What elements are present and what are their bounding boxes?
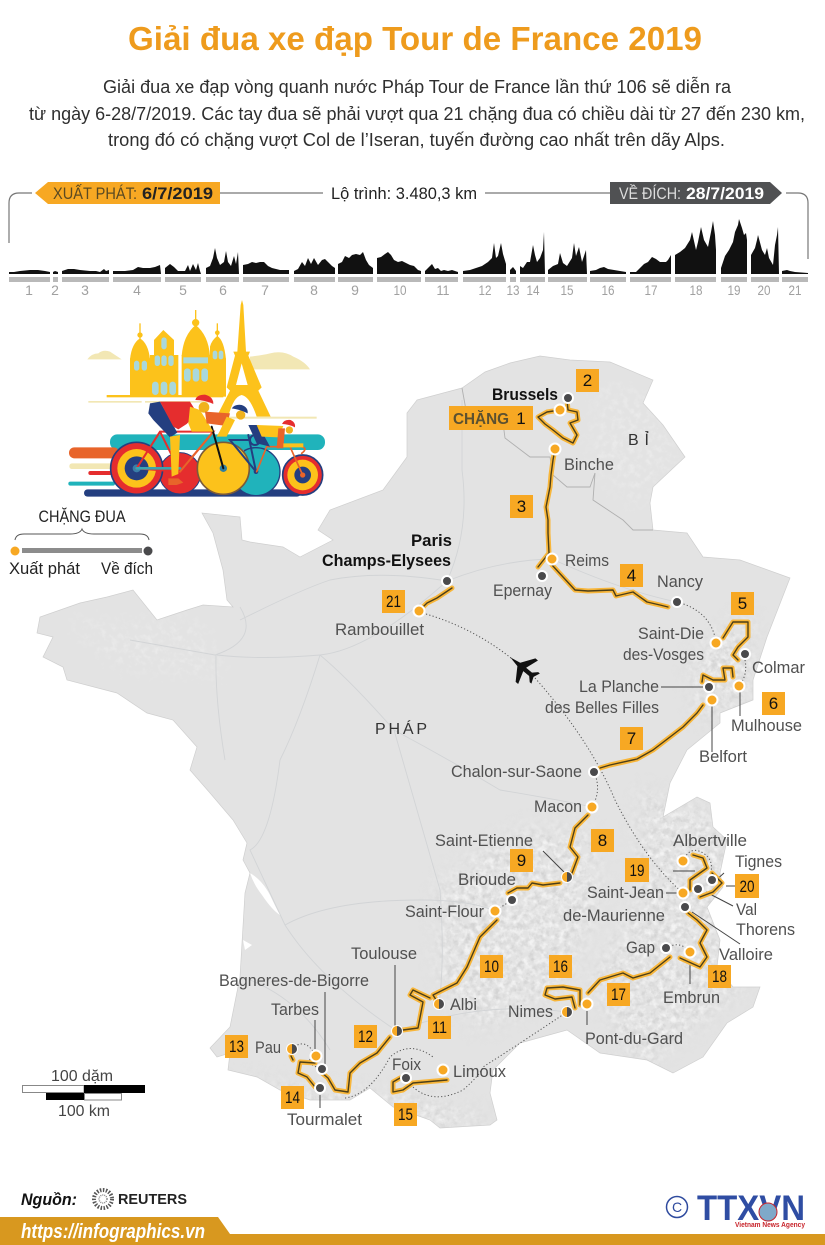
place labels: Albi	[450, 995, 477, 1014]
stage 17 route	[588, 957, 670, 993]
place labels	[219, 385, 805, 1129]
stage number boxes: 17	[611, 985, 626, 1004]
place labels: Albertville	[673, 831, 747, 850]
roads	[130, 400, 677, 1050]
stage 10 route	[433, 920, 497, 1003]
bicycle frames	[137, 427, 305, 475]
stage numbers: 6	[219, 282, 227, 298]
stage numbers: 9	[351, 282, 359, 298]
stage 11 route	[403, 990, 430, 1030]
half markers	[286, 871, 573, 1055]
stage numbers: 18	[690, 282, 703, 298]
stage number boxes: 14	[285, 1088, 300, 1107]
clouds	[87, 351, 310, 369]
legend: stage marker	[9, 507, 153, 578]
place labels: Saint-Etienne	[435, 831, 533, 850]
footer band	[0, 1217, 825, 1245]
scale bar: 100 km	[58, 1103, 110, 1120]
stage 15 route	[393, 1078, 447, 1092]
stage 12 route	[322, 1037, 390, 1092]
stage numbers: 5	[179, 282, 187, 298]
stage number boxes: 13	[229, 1037, 244, 1056]
land base	[38, 356, 790, 1128]
start date tag: 6/7/2019	[142, 185, 213, 203]
finish date tag: 28/7/2019	[686, 185, 764, 203]
stage 9 route	[508, 883, 560, 893]
stage 13 route	[291, 1056, 293, 1060]
stage numbers: 19	[728, 282, 741, 298]
stage number boxes: 15	[398, 1105, 413, 1124]
intro text: trong đó có chặng vượt Col de l’Iseran, tuyến đường cao nhất trên dãy Alps.	[108, 129, 725, 150]
stage number boxes: 6	[769, 694, 778, 713]
finish date tag: VỀ ĐÍCH:	[619, 184, 681, 203]
place labels: Tourmalet	[287, 1110, 362, 1129]
finish date tag	[610, 182, 782, 204]
windows	[134, 337, 223, 395]
place labels: Embrun	[663, 988, 720, 1007]
place labels: Pont-du-Gard	[585, 1029, 683, 1048]
place labels: Nancy	[657, 572, 703, 591]
stage numbers: 16	[602, 282, 615, 298]
place labels: Champs-Elysees	[322, 551, 451, 570]
stage bars	[9, 277, 808, 282]
place labels: Binche	[564, 455, 614, 474]
stage numbers: 8	[310, 282, 318, 298]
rider 2	[205, 405, 248, 437]
stage numbers: 10	[394, 282, 407, 298]
start date tag: XUẤT PHÁT:	[53, 184, 137, 203]
legend: stage marker: Về đích	[101, 559, 153, 578]
place labels: Tignes	[735, 852, 782, 871]
place labels: Chalon-sur-Saone	[451, 762, 582, 781]
illustration: Paris landmarks and cyclists	[68, 300, 325, 497]
place labels: Gap	[626, 938, 655, 957]
elevation profile chart	[9, 219, 808, 298]
stage 16 route	[545, 987, 580, 1008]
total distance: Lộ trình: 3.480,3 km	[331, 184, 477, 203]
stage numbers: 1	[25, 282, 33, 298]
TTXVN logo: C	[672, 1199, 682, 1215]
country label: Bỉ: BỈ	[628, 430, 650, 449]
footer band: https://infographics.vn	[21, 1221, 205, 1243]
Eiffel tower	[217, 300, 271, 417]
stage 19 route	[690, 855, 707, 890]
stage number boxes: 18	[712, 967, 727, 986]
place labels: Saint-Die	[638, 624, 704, 643]
place labels: de-Maurienne	[563, 906, 665, 925]
place labels: des Belles Filles	[545, 698, 659, 717]
stage number boxes: 9	[517, 851, 526, 870]
source: Reuters: Nguồn:	[21, 1190, 77, 1209]
legend: stage marker: CHẶNG ĐUA	[38, 507, 126, 526]
stage numbers: 12	[478, 282, 492, 298]
stage numbers: 2	[51, 282, 59, 298]
stage numbers: 7	[261, 282, 269, 298]
Gironde and Arcachon water	[243, 873, 280, 950]
stage number boxes	[225, 369, 785, 1126]
stage number boxes: 5	[738, 594, 747, 613]
intro text	[29, 76, 805, 150]
buildings	[107, 310, 226, 397]
place labels: Limoux	[453, 1062, 506, 1081]
place labels: Mulhouse	[731, 716, 802, 735]
rider 3	[248, 420, 303, 448]
place labels: Reims	[565, 551, 609, 570]
stage numbers: 15	[560, 282, 574, 298]
scale bar	[22, 1068, 145, 1120]
intro text: Giải đua xe đạp vòng quanh nước Pháp Tour de France lần thứ 106 sẽ diễn ra	[103, 76, 732, 97]
stage numbers	[25, 282, 802, 298]
place labels: Saint-Jean	[587, 883, 664, 902]
legend: stage marker: Xuất phát	[9, 559, 80, 578]
place labels: Toulouse	[351, 944, 417, 963]
stage 1 tag: 1	[516, 409, 526, 428]
stage numbers: 17	[644, 282, 658, 298]
route length header	[9, 182, 808, 259]
start dot	[10, 546, 20, 556]
place labels: Thorens	[736, 920, 795, 939]
stage 1 tag	[449, 406, 533, 430]
bicycle wheels	[111, 442, 323, 496]
rider 1	[148, 395, 213, 485]
place labels: des-Vosges	[623, 645, 704, 664]
place labels: Bagneres-de-Bigorre	[219, 971, 369, 990]
stage number boxes: 11	[432, 1018, 447, 1037]
stage number boxes: 20	[740, 877, 754, 896]
stage number boxes: 16	[553, 957, 568, 976]
scale bar: 100 dặm	[51, 1068, 113, 1085]
stage number boxes: 10	[484, 957, 499, 976]
stage numbers: 11	[436, 282, 450, 298]
place labels: Saint-Flour	[405, 902, 484, 921]
start date tag	[35, 182, 220, 204]
place labels: Brussels	[492, 385, 558, 404]
place labels: Tarbes	[271, 1000, 319, 1019]
stage numbers: 21	[788, 282, 802, 298]
title: Giải đua xe đạp Tour de France 2019	[128, 20, 702, 57]
source: Reuters	[21, 1190, 187, 1209]
intro text: từ ngày 6-28/7/2019. Các tay đua sẽ phải vượt qua 21 chặng đua có chiều dài từ 27 đến 230 km,	[29, 103, 805, 124]
place labels: Belfort	[699, 747, 747, 766]
leader lines	[315, 687, 740, 1108]
stage 1 route	[538, 400, 578, 443]
stage 14 route	[298, 1062, 315, 1087]
stage number boxes: 2	[583, 371, 592, 390]
stage numbers: 13	[506, 282, 520, 298]
place labels: La Planche	[579, 677, 659, 696]
stage 20 route	[700, 873, 722, 897]
place labels: Valloire	[719, 945, 773, 964]
icon: plane	[500, 646, 546, 690]
icon: Reuters logo	[94, 1190, 112, 1208]
place labels: Paris	[411, 531, 452, 550]
speed bars	[68, 401, 325, 497]
stage 5 route	[723, 622, 748, 660]
place labels: Rambouillet	[335, 620, 424, 639]
stage number boxes: 3	[517, 497, 526, 516]
Belgium border	[462, 388, 653, 530]
place labels: Brioude	[458, 870, 516, 889]
stage routes	[291, 400, 748, 1092]
stage number boxes: 12	[358, 1027, 373, 1046]
stage numbers: 20	[758, 282, 771, 298]
place labels: Val	[736, 900, 757, 919]
stage number boxes: 4	[627, 566, 636, 585]
source: Reuters: REUTERS	[118, 1191, 187, 1208]
stage number boxes: 19	[630, 861, 644, 880]
start and finish markers	[286, 393, 750, 1093]
stage numbers: 4	[133, 282, 141, 298]
place labels: Epernay	[493, 581, 552, 600]
place labels: Foix	[392, 1055, 421, 1074]
finish dot	[144, 546, 152, 556]
stage numbers: 3	[81, 282, 89, 298]
stage 8 route	[570, 815, 588, 873]
stage number boxes: 8	[598, 831, 607, 850]
place labels: Colmar	[752, 658, 805, 677]
stage number boxes: 7	[627, 729, 636, 748]
stage 21 route	[420, 588, 452, 610]
transfer flight and dotted links	[292, 602, 746, 1098]
relief shading	[322, 633, 749, 1126]
place labels: Macon	[534, 797, 582, 816]
stage 4 route	[552, 565, 668, 607]
stage 3 route	[538, 449, 555, 567]
TTXVN logo: TTXVN	[697, 1189, 805, 1228]
TTXVN logo: Vietnam News Agency	[735, 1220, 806, 1229]
country label: Pháp: PHÁP	[375, 719, 427, 738]
stage number boxes: 21	[386, 592, 401, 611]
stage 7 route	[600, 705, 703, 768]
place labels: Nimes	[508, 1002, 553, 1021]
stage 18 route	[680, 913, 707, 967]
stage 6 route	[702, 668, 733, 682]
map of France and Belgium	[36, 356, 790, 1128]
stage 1 tag: CHẶNG	[453, 409, 509, 428]
stage numbers: 14	[526, 282, 540, 298]
country outline	[37, 356, 790, 1128]
place labels: Pau	[255, 1038, 281, 1057]
